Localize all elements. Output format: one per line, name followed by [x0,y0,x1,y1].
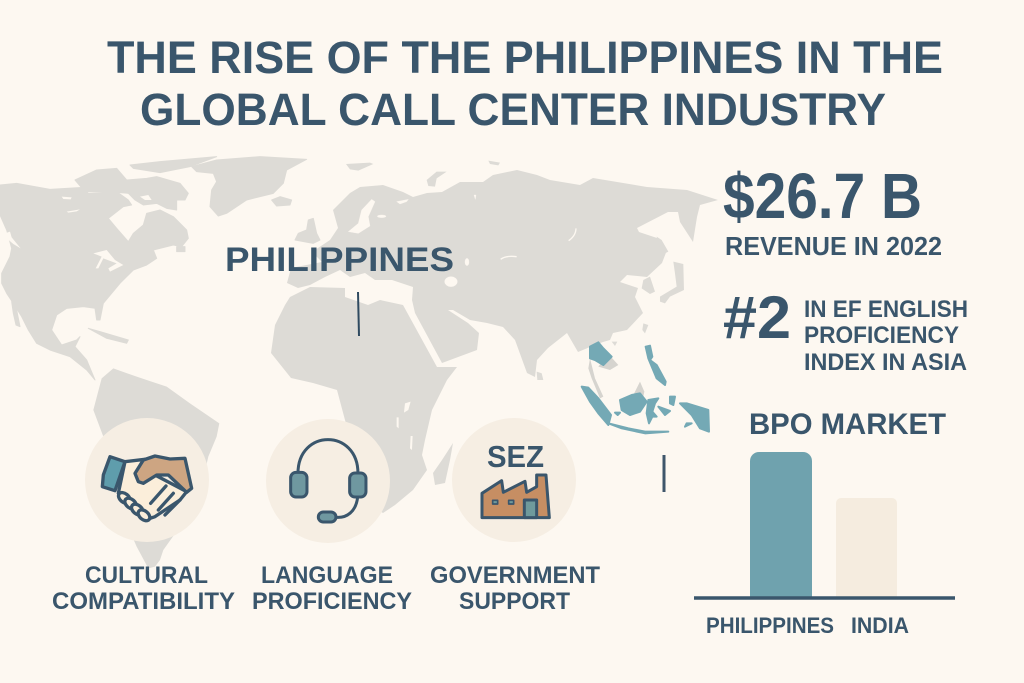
Africa [271,287,457,513]
Southeast Asia highlighted region [582,342,709,433]
Eurasia inland water [348,195,576,287]
label: government support: SUPPORT [459,588,570,615]
label: cultural compatibility: COMPATIBILITY [52,588,235,615]
label: cultural compatibility [52,562,235,615]
icon: SEZ factory: SEZ [487,439,544,474]
map label: Philippines: PHILIPPINES [225,241,454,279]
panel: language proficiency [252,419,412,615]
icon: SEZ factory [482,439,549,518]
label: language proficiency: LANGUAGE [261,562,393,589]
stat: revenue: $26.7 B [723,160,922,232]
icon: handshake [102,456,192,523]
map pointer line lower [662,455,666,492]
Madagascar [433,443,453,485]
bar label: India: INDIA [851,613,909,638]
title: GLOBAL CALL CENTER INDUSTRY [140,84,886,135]
lakes of southern Africa [397,402,413,450]
label: cultural compatibility: CULTURAL [85,562,208,589]
Arctic Russia and East Asia islands [346,161,684,380]
map pointer line [358,292,359,336]
panel: government support [430,418,600,615]
bar: Philippines [750,452,812,597]
label: government support [430,562,600,615]
bar chart: BPO market [694,408,955,638]
stat: English proficiency rank: #2 [723,284,791,351]
chart heading: BPO MARKET [749,408,946,441]
Eurasia [287,170,718,377]
South America [93,368,219,568]
label: government support: GOVERNMENT [430,562,600,589]
label: language proficiency: PROFICIENCY [252,588,412,615]
title [107,32,943,135]
icon: headset [291,440,366,522]
North America and Greenland [0,157,320,380]
panel: cultural compatibility [52,418,235,615]
stat: English proficiency rank: INDEX IN ASIA [804,349,967,376]
stat: revenue: REVENUE IN 2022 [725,231,942,261]
stat: English proficiency rank [723,284,968,376]
world map [0,157,718,568]
stat: English proficiency rank: IN EF ENGLISH [804,296,968,323]
bar label: Philippines: PHILIPPINES [706,613,834,638]
bar: India [836,498,897,597]
title: THE RISE OF THE PHILIPPINES IN THE [107,32,943,83]
label: language proficiency [252,562,412,615]
stat: English proficiency rank: PROFICIENCY [804,322,959,349]
